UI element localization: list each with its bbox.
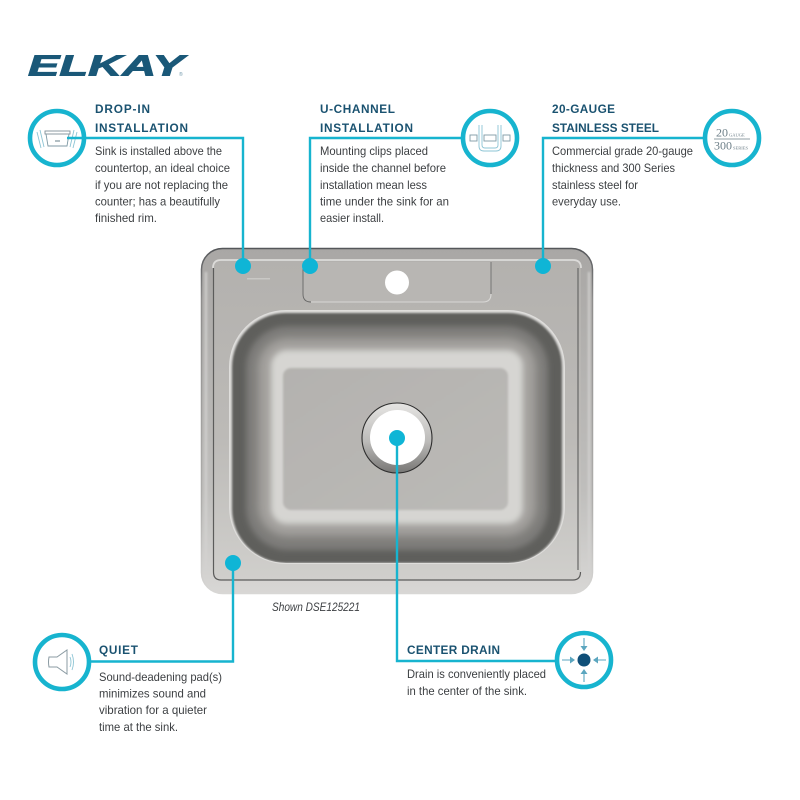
sink bowl bbox=[229, 310, 565, 564]
body text: minimizes sound and bbox=[99, 686, 206, 700]
leader line bbox=[310, 138, 464, 266]
sink deck bbox=[202, 248, 592, 594]
callout: center drain bbox=[389, 430, 611, 698]
faucet panel bbox=[303, 262, 491, 302]
body text: Sound-deadening pad(s) bbox=[99, 670, 222, 684]
leader line bbox=[67, 138, 243, 266]
body text: time at the sink. bbox=[99, 720, 178, 734]
body text: time under the sink for an bbox=[320, 194, 449, 208]
leader line bbox=[543, 138, 706, 266]
body text: easier install. bbox=[320, 211, 384, 225]
body text: vibration for a quieter bbox=[99, 703, 207, 717]
heading: INSTALLATION bbox=[95, 121, 188, 135]
body text: Mounting clips placed bbox=[320, 144, 428, 158]
drain bbox=[362, 403, 432, 473]
body text bbox=[552, 144, 693, 208]
heading bbox=[95, 102, 188, 135]
icon: drain with arrows bbox=[557, 633, 611, 687]
heading bbox=[320, 102, 413, 135]
icon: speaker bbox=[35, 635, 89, 689]
faucet hole bbox=[385, 270, 409, 294]
heading: STAINLESS STEEL bbox=[552, 121, 659, 135]
anchor dot bbox=[535, 258, 551, 274]
anchor dot bbox=[302, 258, 318, 274]
heading: 20-GAUGE bbox=[552, 102, 615, 116]
body text: Commercial grade 20-gauge bbox=[552, 144, 693, 158]
body text: in the center of the sink. bbox=[407, 684, 527, 698]
callout: u-channel installation bbox=[302, 102, 517, 274]
body text: installation mean less bbox=[320, 178, 427, 192]
heading: DROP-IN bbox=[95, 102, 150, 116]
sink illustration bbox=[202, 248, 592, 594]
heading: CENTER DRAIN bbox=[407, 643, 500, 657]
heading: QUIET bbox=[99, 643, 139, 657]
logo: Elkay: ELKAY bbox=[28, 50, 188, 82]
body text: Drain is conveniently placed bbox=[407, 667, 546, 681]
leader line bbox=[88, 563, 233, 662]
icon: 20 gauge 300 series: 20GAUGE bbox=[716, 126, 745, 140]
body text: inside the channel before bbox=[320, 161, 446, 175]
callout: 20-gauge stainless steel bbox=[535, 102, 759, 274]
body text: countertop, an ideal choice bbox=[95, 161, 230, 175]
body text bbox=[320, 144, 449, 225]
anchor dot bbox=[389, 430, 405, 446]
body text: finished rim. bbox=[95, 211, 157, 225]
logo: Elkay: ® bbox=[179, 71, 183, 78]
anchor dot bbox=[225, 555, 241, 571]
anchor dot bbox=[235, 258, 251, 274]
body text: everyday use. bbox=[552, 194, 621, 208]
icon: 20 gauge 300 series bbox=[705, 111, 759, 165]
body text bbox=[407, 667, 546, 698]
body text bbox=[95, 144, 230, 225]
body text: stainless steel for bbox=[552, 178, 638, 192]
heading: INSTALLATION bbox=[320, 121, 413, 135]
caption: model number: Shown DSE125221 bbox=[272, 602, 360, 614]
icon: 20 gauge 300 series: 300SERIES bbox=[714, 138, 749, 152]
heading bbox=[552, 102, 659, 135]
callout: drop-in installation bbox=[30, 102, 251, 274]
body text: counter; has a beautifully bbox=[95, 194, 220, 208]
logo: Elkay bbox=[28, 50, 188, 82]
leader line bbox=[397, 438, 558, 661]
body text: Sink is installed above the bbox=[95, 144, 222, 158]
icon: drop-in sink bbox=[30, 111, 84, 165]
heading: U-CHANNEL bbox=[320, 102, 395, 116]
callout: quiet bbox=[35, 555, 241, 734]
body text bbox=[99, 670, 222, 734]
body text: thickness and 300 Series bbox=[552, 161, 675, 175]
body text: if you are not replacing the bbox=[95, 178, 228, 192]
icon: u-channel clip bbox=[463, 111, 517, 165]
